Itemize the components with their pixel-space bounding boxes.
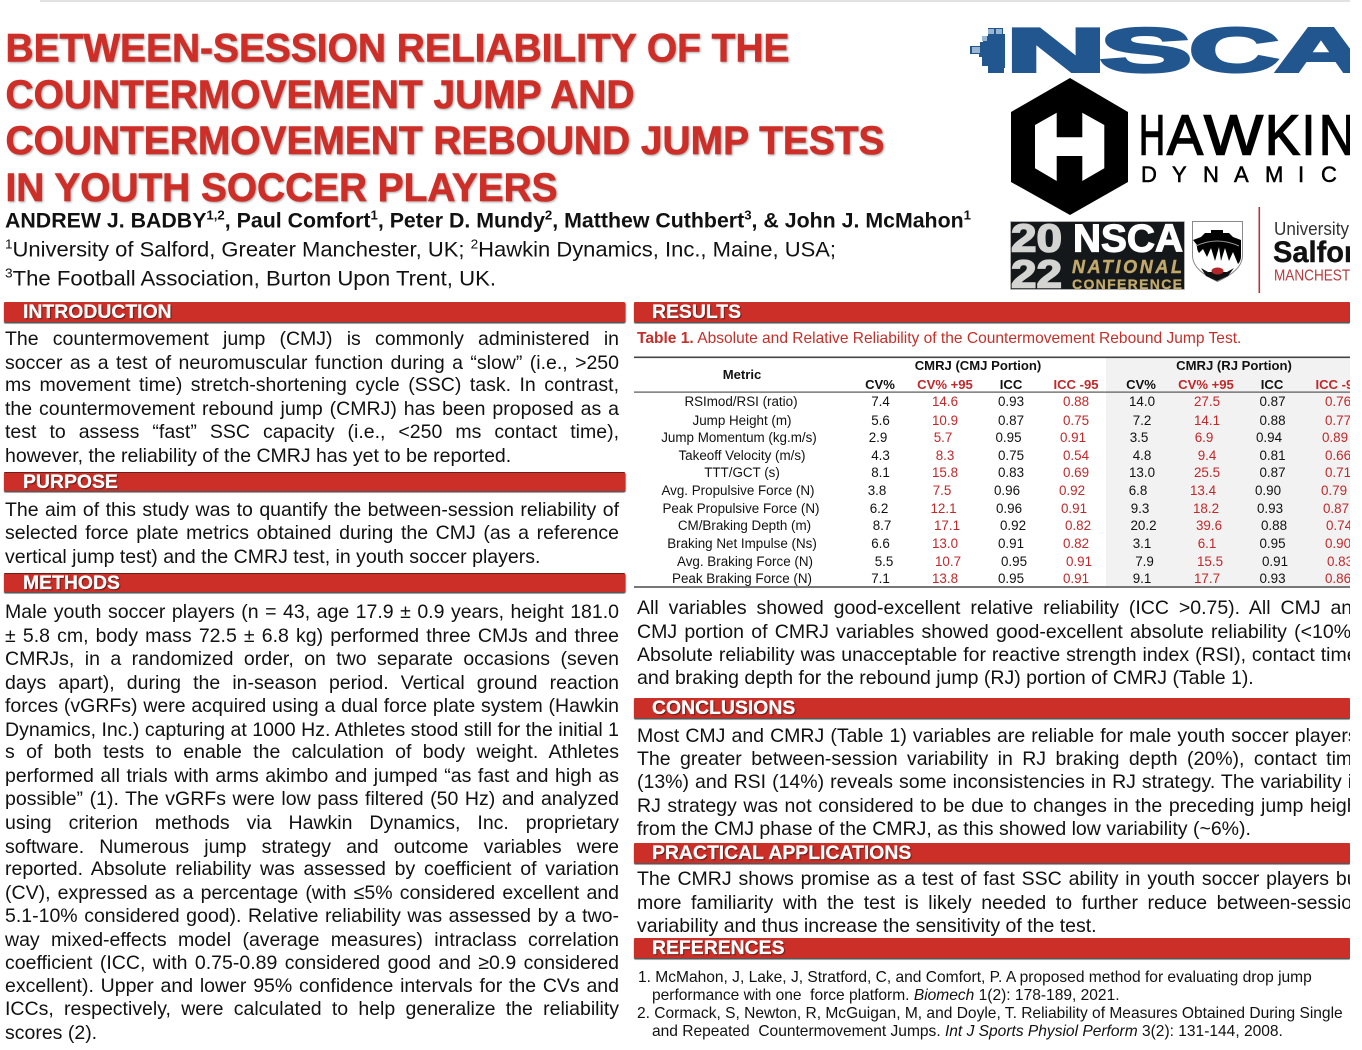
icon: NSCA 2022 National Conference logo: CONFERENCE [1072,276,1182,292]
icon: NSCA logo: S [1100,16,1192,86]
table: reliability statistics: 0.91 [1262,554,1288,569]
text block: conclusions [637,725,1350,840]
table: reliability statistics: 0.79 [1321,483,1347,498]
icon: Hawkin Dynamics logo: K [1265,104,1300,168]
table: reliability statistics: 7.1 [871,571,890,586]
heading: purpose: PURPOSE [23,471,118,493]
icon: NSCA 2022 National Conference logo: 22 [1011,254,1062,296]
text block: purpose: selected force plate metrics obtained during the CMJ (as a reference [5,522,619,544]
text block: methods: Male youth soccer players (n = 43, age 17.9 ± 0.9 years, height 181.0 [5,601,619,623]
icon: NSCA logo: N [1006,16,1106,86]
table: reliability statistics: 5.7 [934,430,952,445]
table: reliability statistics: Jump Height (m) [693,413,791,428]
text block: introduction: test to assess “fast” SSC capacity (i.e., <250 ms contact time), [5,421,619,443]
table: reliability statistics: 9.1 [1133,571,1151,586]
table: reliability statistics: 10.7 [935,554,961,569]
table: reliability statistics: 0.92 [1059,483,1085,498]
table: reliability statistics: 0.87 [1259,394,1286,409]
icon: University of Salford logo [1273,219,1362,284]
icon: Hawkin Dynamics logo [1011,78,1362,215]
reference list: 1. McMahon, J, Lake, J, Stratford, C, and Comfort, P. A proposed method for evaluating drop jump [638,969,1312,986]
table: reliability statistics: 0.81 [1259,448,1286,463]
table: reliability statistics: 0.75 [1063,413,1089,428]
heading: practical applications [634,843,1350,863]
table: reliability statistics: ICC -95 [1053,377,1099,392]
table: reliability statistics: 25.5 [1194,465,1220,480]
text block: methods: reported. Absolute reliability was assessed by coefficient of variation [5,858,619,880]
table: reliability statistics: 0.91 [1066,554,1092,569]
table: reliability statistics: 17.1 [934,518,960,533]
text block: introduction: soccer as a test of neuromuscular function during a “slow” (i.e., >250 [5,352,619,374]
panel: results [633,301,1350,689]
table: reliability statistics: Takeoff Velocity (m/s) [678,448,806,463]
table: reliability statistics: 0.83 [998,465,1024,480]
table: reliability statistics: ICC [1000,377,1023,392]
table: reliability statistics: 8.7 [873,518,891,533]
table: reliability statistics: 0.95 [998,571,1024,586]
table: reliability statistics: 15.5 [1197,554,1223,569]
table: reliability statistics [634,356,1350,588]
title: BETWEEN-SESSION RELIABILITY OF THE [6,26,790,70]
panel: practical applications [633,842,1350,937]
text block: methods: way mixed-effects model (average measures) intraclass correlation [5,929,619,951]
icon: Hawkin Dynamics logo: W [1204,104,1263,168]
reference list [637,969,1343,1040]
logos [970,16,1350,296]
icon: NSCA logo: C [1189,16,1279,86]
heading: conclusions [634,698,1350,718]
title [6,26,886,210]
table: reliability statistics: 13.0 [932,536,958,551]
authors and affiliations: , Peter D. Mundy [378,210,545,232]
table: reliability statistics: TTT/GCT (s) [704,465,780,480]
authors and affiliations: 3 [5,266,13,280]
text block: conclusions: from the CMJ phase of the CMRJ, as this showed low variability (~6%). [637,818,1251,840]
text block: results summary [637,597,1350,689]
authors and affiliations: 3 [744,208,752,222]
heading: conclusions: CONCLUSIONS [652,697,795,719]
icon: NSCA 2022 National Conference logo: 20 [1011,218,1062,260]
text block: methods: 5.1-10% considered good). Relative reliability was assessed by a two- [5,905,619,927]
text block: methods: ICCs, respectively, were calculated to help generalize the reliability [5,998,619,1020]
table: reliability statistics: Metric [723,367,761,382]
table: reliability statistics: ICC [1261,377,1284,392]
table: reliability statistics: 20.2 [1130,518,1157,533]
table: reliability statistics: 4.8 [1133,448,1151,463]
text block: conclusions: (13%) and RSI (14%) reveals some inconsistencies in RJ strategy. The variability in [637,771,1350,793]
table: reliability statistics: Avg. Propulsive Force (N) [661,483,815,498]
table: reliability statistics: RSImod/RSI (ratio) [684,394,798,409]
table: reliability statistics: CM/Braking Depth (m) [678,518,811,533]
reference list: and Repeated Countermovement Jumps. Int J Sports Physiol Perform 3(2): 131-144, 2008. [652,1023,1283,1040]
table: reliability statistics: 9.4 [1198,448,1217,463]
text block: methods: performed all trials with arms akimbo and jumped “as fast and high as [5,765,619,787]
authors and affiliations: , & John J. McMahon [752,210,964,232]
heading: methods [4,573,625,592]
table: reliability statistics: 14.0 [1129,394,1155,409]
table: reliability statistics: 0.88 [1259,413,1286,428]
icon: Hawkin Dynamics logo: A [1167,104,1203,168]
text block: conclusions: RJ strategy was not considered to be due to changes in the preceding jump height [637,795,1350,817]
text block: results summary: Absolute reliability was unacceptable for reactive strength index (RSI), contact time, [637,644,1350,666]
heading: methods: METHODS [23,572,120,594]
authors and affiliations: University of Salford, Greater Manchester, UK; [13,238,471,262]
table: reliability statistics: 8.1 [871,465,890,480]
panel: purpose [3,471,626,568]
text block: introduction: ms movement time) stretch-shortening cycle (SSC) task. In contrast, [5,374,619,396]
table: reliability statistics: Peak Braking Force (N) [672,571,812,586]
table: reliability statistics: 0.87 [1259,465,1286,480]
table: reliability statistics: 0.96 [994,483,1020,498]
table: reliability statistics: 14.6 [932,394,958,409]
table: reliability statistics: 3.8 [868,483,886,498]
heading: introduction: INTRODUCTION [23,301,172,323]
reference list: 2. Cormack, S, Newton, R, McGuigan, M, and Doyle, T. Reliability of Measures Obtained During Single [637,1005,1343,1022]
table: reliability statistics: 5.5 [875,554,893,569]
text block: results summary: and braking depth for the rebound jump (RJ) portion of CMRJ (Table 1). [637,667,1254,689]
text block: methods: ± 5.8 cm, body mass 72.5 ± 6.8 kg) performed three CMJs and three [5,625,619,647]
table: reliability statistics: CMRJ (CMJ Portion) [915,358,1041,373]
table: reliability statistics: 14.1 [1194,413,1220,428]
table: reliability statistics: 0.95 [1001,554,1027,569]
table: reliability statistics: 0.93 [1257,501,1283,516]
text block: conclusions: Most CMJ and CMRJ (Table 1) variables are reliable for male youth soccer players. [637,725,1350,747]
divider [1258,207,1260,293]
title: COUNTERMOVEMENT REBOUND JUMP TESTS [6,119,884,163]
table: reliability statistics: 3.1 [1133,536,1151,551]
table: reliability statistics: 7.9 [1135,554,1154,569]
authors and affiliations: 1,2 [206,208,225,222]
table: reliability statistics: 0.87 [998,413,1024,428]
icon: Hawkin Dynamics logo: H [1139,104,1165,168]
text block: methods: days apart), during the in-season period. Vertical ground reaction [5,672,619,694]
text block: practical applications: The CMRJ shows promise as a test of fast SSC ability in youth soccer players but [637,868,1350,890]
text block: methods: CMRJs, in a randomized order, on two separate occasions (seven [5,648,619,670]
heading: references [634,938,1350,958]
heading: results [634,302,1350,322]
authors and affiliations: The Football Association, Burton Upon Trent, UK. [13,268,496,290]
icon: NSCA 2022 National Conference logo: NATIONAL [1072,257,1182,277]
table: reliability statistics: 2.9 [869,430,887,445]
icon: NSCA 2022 National Conference logo [1010,218,1184,296]
text block: purpose: vertical jump test) and the CMRJ test, in youth soccer players. [5,546,540,568]
table: reliability statistics: CV% [865,377,895,392]
table: reliability statistics: 13.8 [932,571,958,586]
table: reliability statistics: 0.82 [1063,536,1089,551]
table: reliability statistics: 0.88 [1261,518,1287,533]
table: reliability statistics: 0.89 [1322,430,1348,445]
table: reliability statistics: 7.2 [1133,413,1151,428]
table: reliability statistics: 10.9 [932,413,958,428]
table: reliability statistics: 17.7 [1194,571,1220,586]
table: reliability statistics: 6.6 [871,536,890,551]
table: reliability statistics: Avg. Braking Force (N) [677,554,813,569]
text block: methods: using criterion methods via Hawkin Dynamics, Inc. proprietary [5,812,619,834]
authors and affiliations: 2 [545,208,552,222]
text block: results summary: All variables showed good-excellent relative reliability (ICC >0.75). All CMJ and [637,597,1350,619]
table: reliability statistics: 0.93 [1259,571,1286,586]
table: reliability statistics: 0.91 [1061,501,1087,516]
icon: Hawkin Dynamics logo: I [1302,104,1315,168]
table caption: Table 1. Absolute and Relative Reliability of the Countermovement Rebound Jump Test. [637,330,1241,347]
table: reliability statistics: Jump Momentum (kg.m/s) [661,430,817,445]
text block: methods: (CV), expressed as a percentage (with ≤5% considered excellent and [5,882,619,904]
panel: conclusions [633,697,1350,840]
table: reliability statistics: 0.54 [1063,448,1090,463]
table: reliability statistics: 5.6 [871,413,890,428]
text block: conclusions: The greater between-session variability in RJ braking depth (20%), contact time [637,748,1350,770]
table: reliability statistics: 12.1 [930,501,957,516]
table: reliability statistics: 6.8 [1129,483,1147,498]
table: reliability statistics: 0.87 [1323,501,1349,516]
table: reliability statistics: 4.3 [871,448,890,463]
table: reliability statistics: 18.2 [1193,501,1219,516]
table: reliability statistics: 0.94 [1256,430,1283,445]
table: reliability statistics: 13.0 [1129,465,1155,480]
table: reliability statistics: 0.95 [995,430,1022,445]
table: reliability statistics: 39.6 [1196,518,1222,533]
text block: practical applications [637,868,1350,937]
text block: practical applications: more familiarity with the test is likely needed to further reduce between-session [637,892,1350,914]
authors and affiliations: ANDREW J. BADBY [5,210,203,232]
icon: NSCA logo [970,16,1362,86]
table: reliability statistics: CV% +95 [1178,377,1234,392]
text block: methods: scores (2). [5,1022,97,1044]
text block: results summary: CMJ portion of CMRJ variables showed good-excellent absolute reliability (<10%). [637,621,1350,643]
text block: methods: s of both tests to enable the calculation of body weight. Athletes [5,741,619,763]
table: reliability statistics: Peak Propulsive Force (N) [662,501,820,516]
table: reliability statistics: 13.4 [1190,483,1217,498]
authors and affiliations: Hawkin Dynamics, Inc., Maine, USA; [478,238,836,262]
table: reliability statistics: 7.4 [871,394,890,409]
icon: NSCA 2022 National Conference logo: NSCA [1073,218,1183,260]
authors and affiliations: , Paul Comfort [225,210,371,232]
table: reliability statistics: 6.1 [1198,536,1216,551]
table: reliability statistics: 0.82 [1065,518,1091,533]
table: reliability statistics: 0.95 [1259,536,1286,551]
table: reliability statistics: 0.92 [1000,518,1026,533]
table: reliability statistics: 7.5 [933,483,951,498]
table: reliability statistics: CMRJ (RJ Portion) [1176,358,1292,373]
text block: introduction: The countermovement jump (CMJ) is commonly administered in [5,328,619,350]
text block: introduction [5,328,619,467]
table: reliability statistics: 6.9 [1195,430,1213,445]
table: reliability statistics: 27.5 [1194,394,1220,409]
text block: methods: excellent). Upper and lower 95% confidence intervals for the CVs and [5,975,619,997]
authors and affiliations [5,208,971,290]
table: reliability statistics: 0.69 [1063,465,1089,480]
table: reliability statistics: 6.2 [870,501,888,516]
text block: purpose: The aim of this study was to quantify the between-session reliability of [5,499,619,521]
text block: methods: possible” (1). The vGRFs were low pass filtered (50 Hz) and analyzed [5,788,619,810]
table: reliability statistics: CV% [1126,377,1156,392]
table: reliability statistics: 0.96 [996,501,1022,516]
table: reliability statistics: 15.8 [932,465,958,480]
table: reliability statistics: 0.75 [998,448,1024,463]
panel: methods [3,572,626,1044]
heading: practical applications: PRACTICAL APPLICATIONS [652,842,911,864]
text block: purpose [5,499,620,568]
icon: shield crest [1192,222,1242,282]
table: reliability statistics: 8.3 [936,448,954,463]
table: reliability statistics: 9.3 [1131,501,1149,516]
table: reliability statistics: 0.88 [1063,394,1089,409]
title: IN YOUTH SOCCER PLAYERS [6,166,558,210]
table: reliability statistics: CV% +95 [917,377,973,392]
text block: methods: software. Numerous jump strategy and outcome variables were [5,836,619,858]
table: reliability statistics: 0.93 [998,394,1024,409]
table: reliability statistics: Braking Net Impulse (Ns) [667,536,817,551]
reference list: performance with one force platform. Biomech 1(2): 178-189, 2021. [652,987,1120,1004]
table: reliability statistics: 0.91 [998,536,1024,551]
table: reliability statistics: 0.90 [1255,483,1281,498]
text block: introduction: however, the reliability of the CMRJ has yet to be reported. [5,445,511,467]
authors and affiliations: , Matthew Cuthbert [552,210,744,232]
heading: results: RESULTS [652,301,741,323]
table: reliability statistics: 0.91 [1060,430,1086,445]
heading: introduction [4,302,625,322]
heading: purpose [4,472,625,491]
text block: practical applications: variability and thus increase the sensitivity of the test. [637,915,1097,937]
heading: references: REFERENCES [652,937,785,959]
authors and affiliations: 2 [471,236,478,252]
authors and affiliations: 1 [371,208,378,222]
text block: methods: Dynamics, Inc.) capturing at 1000 Hz. Athletes stood still for the initial 1 [5,719,619,741]
panel: references [633,937,1350,1040]
title: COUNTERMOVEMENT JUMP AND [6,73,634,117]
text block: introduction: the countermovement rebound jump (CMRJ) has been proposed as a [5,398,619,420]
icon: NSCA logo: A [1275,16,1350,86]
authors and affiliations: 1 [5,236,13,252]
table: reliability statistics: 0.91 [1063,571,1089,586]
authors and affiliations: 1 [964,208,971,222]
text block: methods [5,601,619,1044]
table: reliability statistics: 3.5 [1130,430,1148,445]
text block: methods: forces (vGRFs) were acquired using a dual force plate system (Hawkin [5,695,619,717]
text block: methods: coefficient (ICC, with 0.75-0.89 considered good and ≥0.9 considered [5,952,619,974]
panel: introduction [3,301,626,467]
